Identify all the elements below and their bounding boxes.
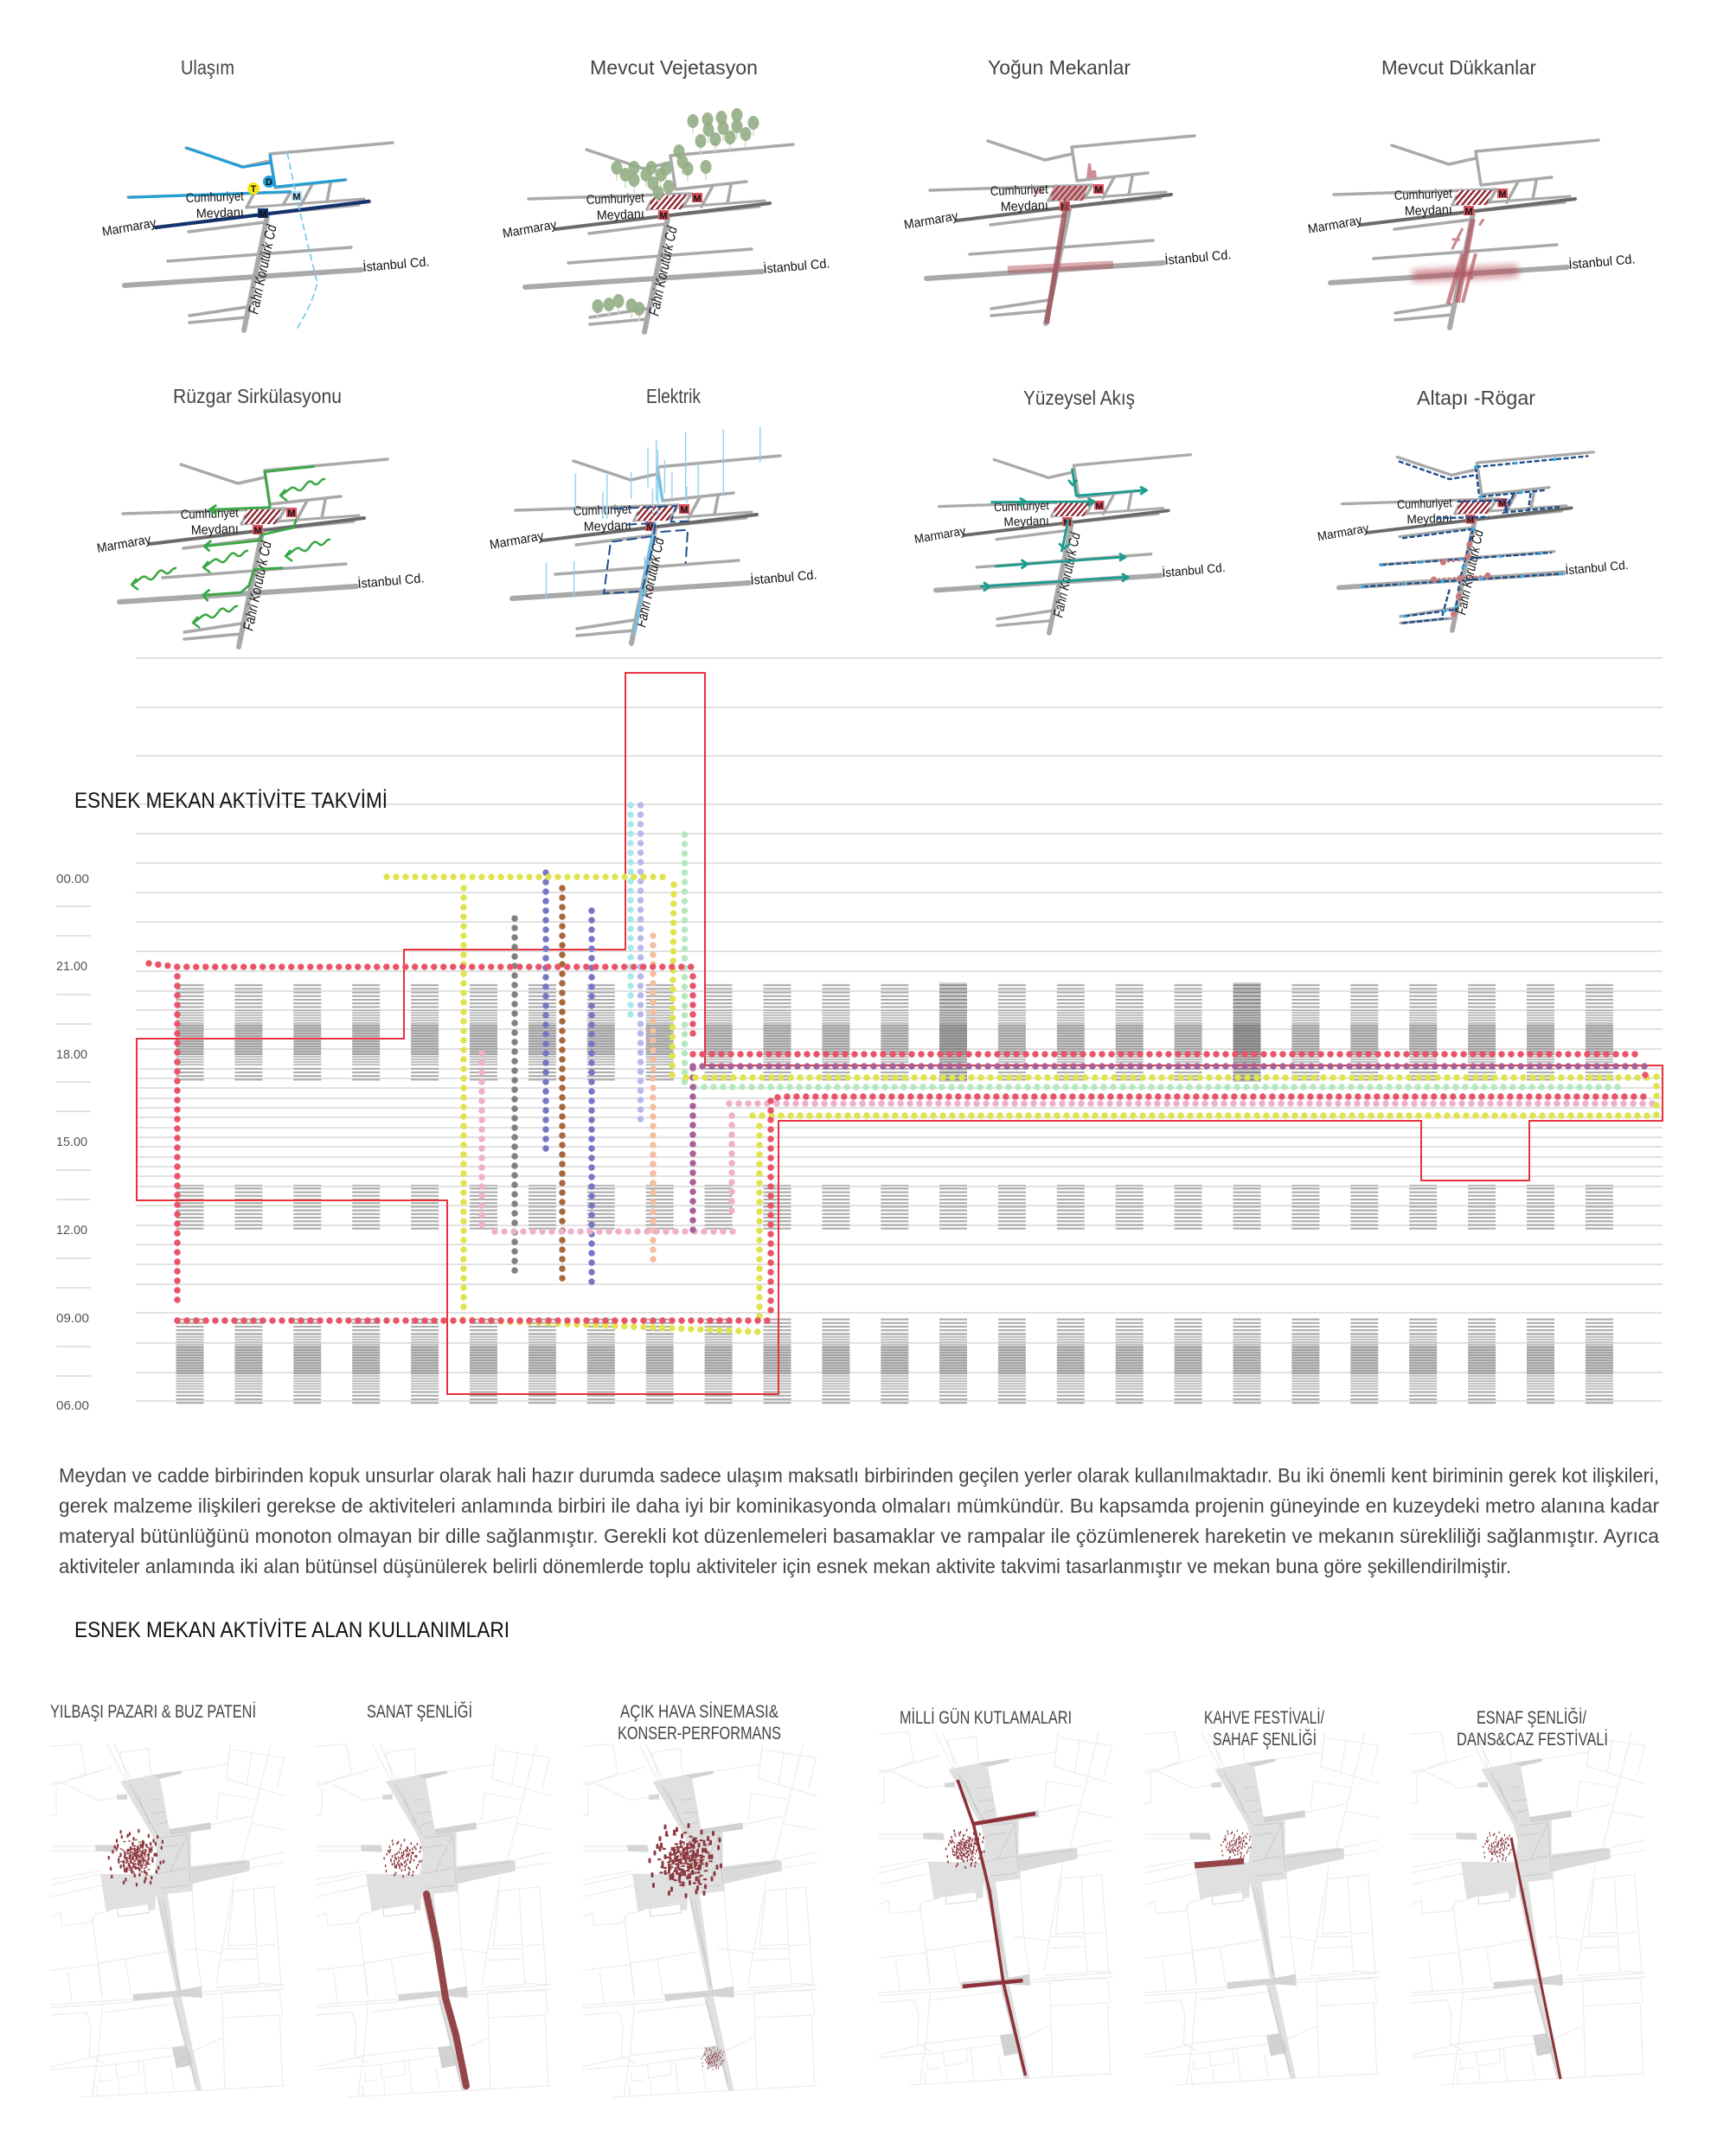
time axis labels: 00.00 [56,872,89,886]
road base and labels: Cumhuriyet [573,502,632,519]
road base and labels: İstanbul Cd. [750,566,817,588]
road base and labels: İstanbul Cd. [1162,560,1226,580]
panel: Esnaf Şenliği map [1411,1708,1645,2085]
text block: project description: materyal bütünlüğünü monoton olmayan bir dille sağlanmıştır. Gerekli kot düzenlemeleri basamaklar ve rampalar ile çözümlenerek hareketin ve mekanın sürekliliği sağlanmıştır. Ayrıca [59,1525,1659,1547]
chart: flexible space activity calendar [56,658,1663,1413]
road base and labels: Meydanı [584,518,631,534]
heading: SAHAF ŞENLİĞİ [1213,1730,1317,1750]
station markers [247,176,302,220]
surface flow arrows [980,469,1146,591]
heading: Mevcut Dükkanlar: Mevcut Dükkanlar [1381,56,1536,79]
base plan [316,1744,550,2097]
time axis labels: 09.00 [56,1311,89,1326]
grid lines and time ticks [56,658,1663,1401]
text block: project description: Meydan ve cadde birbirinden kopuk unsurlar olarak hali hazır durumda sadece ulaşım maksatlı birbirinden geçilen yerler olarak kullanılmaktadır. Bu iki önemli kent biriminin gerek kot ilişkileri, [59,1464,1659,1487]
road base and labels: Cumhuriyet [1394,187,1453,203]
road base and labels: Fahri Korutürk Cd [240,540,275,632]
base plan [1144,1732,1379,2085]
road base and labels: Cumhuriyet [990,182,1049,199]
art festival street [426,1894,466,2086]
road base and labels: Meydanı [1405,202,1452,219]
heading [618,1702,781,1743]
road base and labels: Marmaray [1317,521,1370,544]
time axis labels: 15.00 [56,1135,87,1149]
road base and labels: Meydanı [597,207,644,223]
blurred shop band [1413,271,1518,276]
panel: Yoğun Mekanlar map [903,56,1232,323]
heading: Yoğun Mekanlar: Yoğun Mekanlar [988,56,1131,79]
panel: Altapı -Rögar map [1317,387,1629,630]
road base and labels: Marmaray [96,532,152,556]
panel: Sanat Şenliği map [316,1702,550,2097]
road base and labels: M [1094,185,1103,195]
time axis labels: 12.00 [56,1223,87,1238]
road base and labels: Cumhuriyet [1397,496,1452,512]
road base and labels: M [680,505,689,515]
heading [1457,1708,1608,1750]
road base and labels: Meydanı [1001,198,1048,214]
panel: Yüzeysel Akış map [913,387,1226,633]
crowd cluster [1483,1832,1513,1862]
transport lines [128,148,369,330]
map labels [101,189,430,316]
base plan [50,1744,285,2097]
panel: Mevcut Vejetasyon map [502,56,830,332]
crowd cluster [109,1830,163,1885]
road base and labels: M [1063,518,1071,528]
road base and labels: Marmaray [1307,213,1363,237]
panel: Ulaşım map [101,56,430,330]
parade routes [958,1780,1026,2076]
activity dotted tracks [149,805,1656,1332]
road base and labels [913,455,1226,633]
map labels: Cumhuriyet [186,189,245,206]
road base and labels: Meydanı [1003,515,1049,529]
road base and labels: Meydanı [191,521,239,538]
text block: project description [59,1464,1659,1577]
road base and labels [489,456,817,643]
heading: KONSER-PERFORMANS [618,1724,781,1743]
panel: Mevcut Dükkanlar map [1307,56,1636,328]
time axis labels: 18.00 [56,1047,87,1062]
base plan [582,1744,817,2097]
map labels: Marmaray [101,215,157,240]
shop strips [1448,219,1483,304]
crowd cluster [946,1829,984,1868]
road base and labels: İstanbul Cd. [763,255,830,277]
panel: Kahve Festivali map [1144,1708,1379,2085]
large crowd cluster [650,1825,721,1897]
map labels: Meydanı [196,205,244,221]
road base and labels: Marmaray [489,528,545,553]
road base and labels [502,144,830,332]
road base and labels [903,136,1232,323]
road base and labels: Marmaray [903,208,959,233]
road base and labels: Cumhuriyet [586,191,645,208]
text block: project description: aktiviteler anlamında iki alan bütünsel düşünülerek belirli dönemlerde toplu aktiviteler için esnek mekan aktivite takvimi tasarlanmıştır ve mekan buna göre şekillendirilmiştir. [59,1555,1511,1577]
road base and labels: M [1060,202,1069,213]
station markers: D [266,177,272,188]
heading: YILBAŞI PAZARI & BUZ PATENİ [50,1702,256,1722]
road base and labels [96,459,425,647]
road base and labels: İstanbul Cd. [1164,246,1232,268]
road base and labels: M [253,526,262,536]
time axis labels: 06.00 [56,1398,89,1413]
heading: Ulaşım: Ulaşım [181,56,234,79]
road base and labels: M [646,522,655,533]
road base and labels: M [1498,189,1507,200]
road base and labels: Fahri Korutürk Cd [1453,528,1487,617]
road base and labels [1307,140,1636,328]
road base and labels: M [1498,499,1506,509]
panel: Açık Hava Sineması map [582,1702,817,2097]
road base and labels: M [659,211,668,221]
heading: Mevcut Vejetasyon: Mevcut Vejetasyon [590,56,758,79]
station markers: M [292,192,301,202]
road base and labels: Fahri Korutürk Cd [1050,531,1084,619]
trees [592,108,759,322]
map labels: İstanbul Cd. [362,253,430,275]
road base and labels: M [1095,502,1103,511]
road base and labels: İstanbul Cd. [1565,557,1629,578]
time axis labels [56,872,89,1413]
festival route [1511,1838,1560,2079]
map labels: Fahri Korutürk Cd [245,223,280,316]
station markers: M [259,209,267,220]
electric lines [546,426,760,634]
base plan [1411,1732,1645,2085]
road base and labels: İstanbul Cd. [357,570,425,592]
road base and labels: M [1466,515,1474,525]
red usage outline [137,673,1663,1394]
heading: AÇIK HAVA SİNEMASI& [620,1702,778,1722]
road base and labels: Meydanı [1406,512,1452,527]
heading: Altapı -Rögar: Altapı -Rögar [1417,387,1535,409]
crowd cluster [1221,1830,1251,1860]
grey density columns [176,982,1613,1404]
road base and labels: M [1464,207,1473,217]
road base and labels: İstanbul Cd. [1568,251,1636,272]
heading: KAHVE FESTİVALİ/ [1204,1708,1324,1728]
panel: Milli Gün Kutlamaları map [878,1708,1112,2085]
road base and labels [1317,452,1629,630]
road base and labels: Cumhuriyet [181,506,240,522]
heading: Elektrik: Elektrik [646,385,701,407]
station markers: T [251,184,257,195]
small crowd cluster [702,2048,723,2070]
heading [1204,1708,1324,1750]
text block: project description: gerek malzeme ilişkileri gerekse de aktiviteleri anlamında birbiri ile daha iyi bir kominikasyonda olmaları mümkündür. Bu kapsamda projenin güneyinde en kuzeydeki metro alanına kadar [59,1494,1659,1517]
panel: Rüzgar Sirkülasyonu map [96,385,425,647]
crowd cluster [384,1839,421,1878]
wind lines [203,466,315,601]
section heading: activity area uses: ESNEK MEKAN AKTİVİTE ALAN KULLANIMLARI [74,1617,509,1642]
panel: Yılbaşı Pazarı map [50,1702,285,2097]
heading: Yüzeysel Akış: Yüzeysel Akış [1023,387,1135,409]
time axis labels: 21.00 [56,959,87,974]
coffee festival street [1195,1861,1244,1865]
road base map [125,143,393,330]
heading: SANAT ŞENLİĞİ [367,1702,472,1722]
road base and labels: Marmaray [502,217,558,241]
heading: DANS&CAZ FESTİVALİ [1457,1730,1608,1750]
road base and labels: Fahri Korutürk Cd [632,536,668,629]
heading: Rüzgar Sirkülasyonu: Rüzgar Sirkülasyonu [173,385,342,407]
heading: MİLLİ GÜN KUTLAMALARI [900,1708,1072,1728]
road base and labels: Fahri Korutürk Cd [645,225,681,317]
base plan [878,1732,1112,2085]
road base and labels: M [693,194,702,204]
wind squiggles [131,479,330,628]
chart title: ESNEK MEKAN AKTİVİTE TAKVİMİ [74,788,388,813]
road base and labels: Cumhuriyet [994,499,1049,515]
infrastructure network [1363,456,1588,624]
panel: Elektrik map [489,385,817,643]
heading: ESNAF ŞENLİĞİ/ [1477,1708,1586,1728]
road base and labels: M [287,509,296,519]
road base and labels: Marmaray [913,524,967,547]
